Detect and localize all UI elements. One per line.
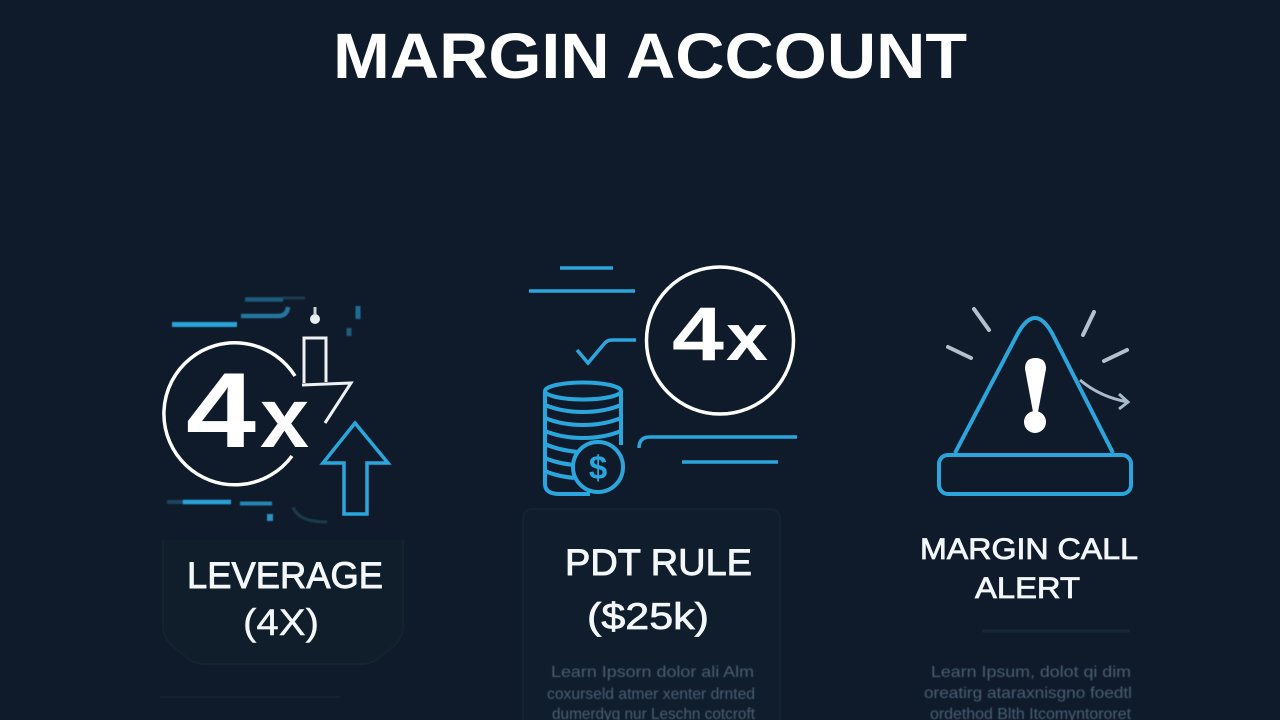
lightning outline	[302, 338, 351, 423]
margin call label	[920, 533, 1138, 605]
title: MARGIN ACCOUNT	[333, 20, 967, 92]
4x label: x	[260, 371, 309, 466]
pdt label: ($25k)	[587, 596, 709, 637]
leverage label	[187, 555, 383, 643]
leverage label: (4X)	[243, 602, 319, 643]
pdt description text: Learn Ipsorn dolor ali Alm	[551, 664, 754, 681]
leverage card outline	[163, 540, 403, 664]
icon: warning triangle	[939, 309, 1131, 494]
base bar	[939, 455, 1131, 494]
faint divider	[982, 630, 1130, 632]
4x ring	[164, 343, 295, 485]
coin stack	[545, 382, 621, 494]
4x label: 4	[186, 350, 256, 470]
margin call description text: Learn Ipsum, dolot qi dim	[931, 664, 1131, 681]
curved arrow	[1080, 380, 1128, 409]
4x label	[186, 350, 309, 470]
pdt description text: coxurseld atmer xenter drnted	[547, 686, 755, 703]
exclamation mark	[1024, 358, 1046, 433]
panel: leverage	[160, 298, 403, 697]
4x label	[672, 292, 768, 377]
warning rays	[948, 309, 1127, 361]
4x label: x	[726, 300, 768, 374]
4x label: 4	[672, 292, 724, 377]
faint divider	[160, 696, 340, 698]
4x ring	[646, 267, 794, 414]
panel: margin call alert	[920, 309, 1138, 720]
pdt description text	[547, 664, 756, 720]
pdt label: PDT RULE	[565, 542, 752, 583]
data dashes	[167, 298, 358, 522]
margin call label: ALERT	[975, 572, 1080, 605]
icon: 4x circle with lightning and arrow	[164, 298, 388, 522]
pdt card outline	[523, 509, 780, 720]
lock glyph	[310, 307, 320, 324]
accent lines	[529, 268, 797, 462]
up arrow	[323, 423, 388, 514]
margin call description text	[924, 664, 1132, 720]
leverage label: LEVERAGE	[187, 555, 383, 596]
dollar coin	[573, 442, 623, 492]
icon: 4x circle with coins	[529, 267, 797, 494]
margin call description text: oreatirg ataraxnisgno foedtl	[924, 685, 1132, 702]
dollar coin: $	[589, 449, 607, 486]
panel: pdt rule	[523, 267, 797, 720]
triangle	[955, 318, 1113, 453]
margin call label: MARGIN CALL	[920, 533, 1138, 566]
pdt label	[565, 542, 752, 637]
